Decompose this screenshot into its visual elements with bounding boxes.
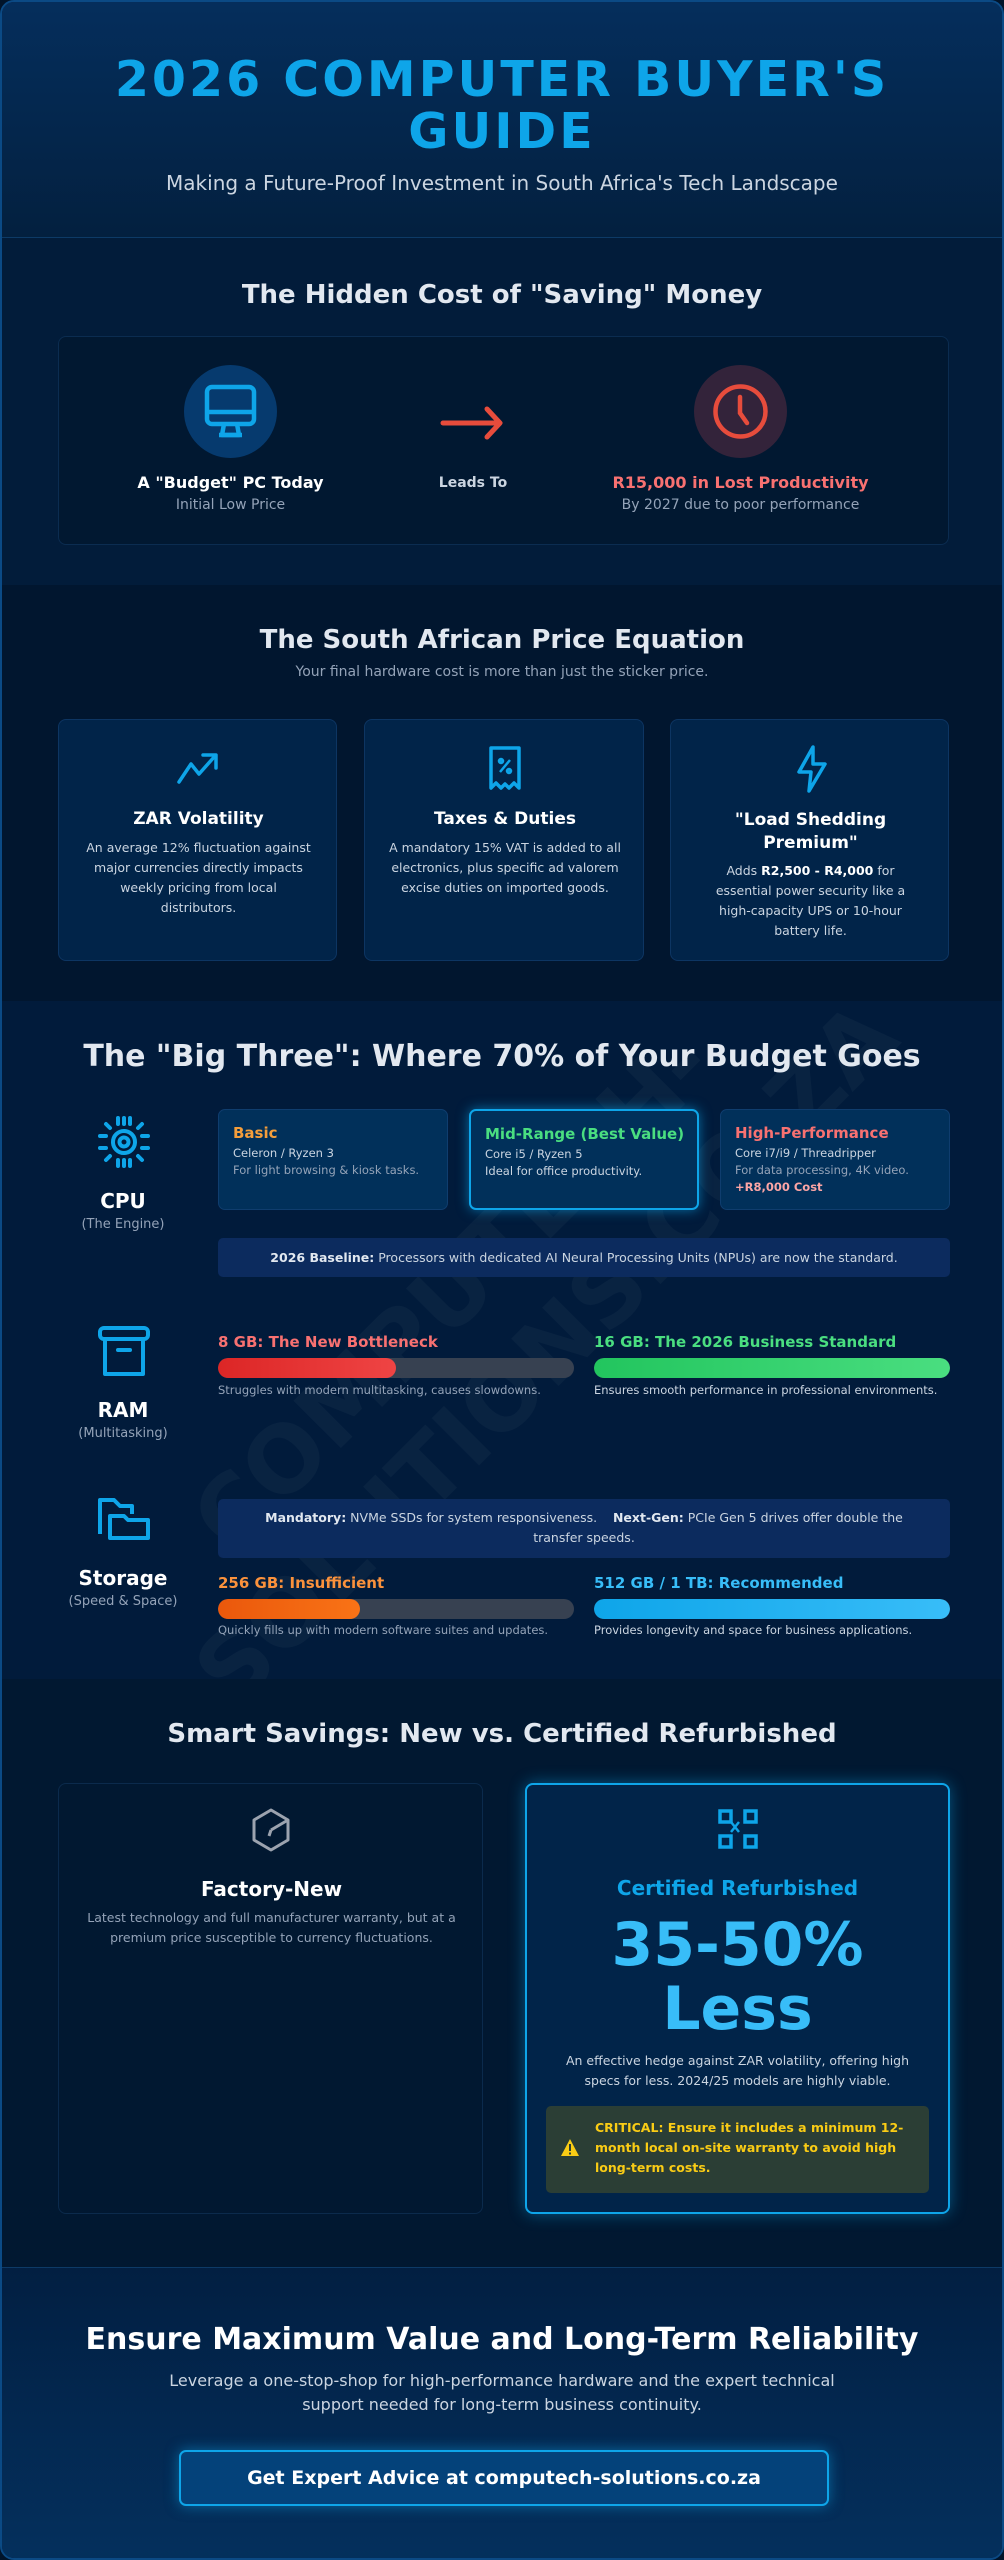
text: Ensures smooth performance in professional environments. [594, 1383, 937, 1397]
card: ZAR volatility: An average 12% fluctuation against major currencies directly impacts weekly pricing from local distributors. [86, 840, 311, 915]
card: certified refurbished: 35-50% [611, 1910, 864, 1980]
label: lost productivity: By 2027 due to poor performance [622, 497, 859, 513]
card: certified refurbished: An effective hedge against ZAR volatility, offering high specs for less. 2024/25 models are highly viable. [566, 2053, 909, 2088]
card: taxes [364, 719, 644, 961]
subtitle: Making a Future-Proof Investment in South Africa's Tech Landscape [166, 171, 838, 195]
tier: high-performance: High-Performance [735, 1124, 889, 1142]
card: factory new: Factory-New [201, 1877, 342, 1901]
icon: refurbish [718, 1809, 758, 1849]
label: leads to: Leads To [439, 475, 507, 491]
callout: critical warning: CRITICAL: Ensure it includes a minimum 12-month local on-site warranty to avoid high long-term costs. [595, 2120, 903, 2175]
section: big three [2, 1001, 1002, 1679]
section: smart savings [2, 1679, 1002, 2268]
text: Quickly fills up with modern software suites and updates. [218, 1623, 548, 1637]
text: Struggles with modern multitasking, causes slowdowns. [218, 1383, 541, 1397]
ram 16gb: 16 GB: The 2026 Business Standard [594, 1333, 896, 1351]
footer [2, 2268, 1002, 2560]
label: budget pc: A "Budget" PC Today [137, 473, 324, 492]
heading: The "Big Three": Where 70% of Your Budget Goes [83, 1039, 921, 1074]
arrow [440, 406, 503, 440]
label: storage [69, 1566, 177, 1609]
icon: monitor [184, 365, 277, 458]
icon: ram [98, 1326, 150, 1376]
label: lost productivity: R15,000 in Lost Productivity [612, 473, 869, 492]
label: storage: (Speed & Space) [69, 1594, 177, 1609]
tier: mid-range: Ideal for office productivity. [485, 1164, 642, 1178]
icon: trend up [177, 753, 218, 784]
comparison panel [58, 336, 949, 545]
card: factory new: Latest technology and full manufacturer warranty, but at a premium price susceptible to currency fluctuations. [87, 1910, 456, 1945]
baseline note [218, 1238, 950, 1277]
card: ZAR volatility: ZAR Volatility [133, 809, 264, 829]
tier: basic: For light browsing & kiosk tasks. [233, 1163, 419, 1177]
heading: Smart Savings: New vs. Certified Refurbished [167, 1719, 837, 1749]
tier: basic [218, 1109, 448, 1210]
tier: mid-range: Mid-Range (Best Value) [485, 1125, 684, 1143]
label: cpu: (The Engine) [81, 1217, 164, 1232]
icon: cpu [98, 1116, 150, 1168]
tier: high-performance [720, 1109, 950, 1210]
call to action button: Get Expert Advice at computech-solutions.co.za [247, 2467, 761, 2489]
card: ZAR volatility [58, 719, 337, 961]
ram 8gb: 8 GB: The New Bottleneck [218, 1333, 438, 1351]
heading: The Hidden Cost of "Saving" Money [242, 280, 762, 310]
tier: basic: Basic [233, 1124, 278, 1142]
tier: mid-range: Core i5 / Ryzen 5 [485, 1147, 583, 1161]
storage 256: 256 GB: Insufficient [218, 1574, 384, 1592]
label: ram [78, 1398, 168, 1441]
card: load shedding [670, 719, 949, 961]
header [2, 2, 1002, 238]
label: budget pc [137, 473, 324, 513]
tier: high-performance: +R8,000 Cost [735, 1180, 823, 1194]
tier: high-performance: Core i7/i9 / Threadripper [735, 1146, 876, 1160]
icon: clock [694, 365, 787, 458]
title: 2026 COMPUTER BUYER'S [115, 51, 889, 108]
section: price equation [2, 585, 1002, 1001]
call to action button [179, 2450, 829, 2506]
label: budget pc: Initial Low Price [176, 497, 285, 513]
label: ram: RAM [98, 1398, 148, 1422]
label: ram: (Multitasking) [78, 1426, 168, 1441]
icon: box [252, 1808, 290, 1852]
title [115, 51, 889, 160]
card: taxes: Taxes & Duties [434, 809, 576, 829]
card: certified refurbished [525, 1783, 950, 2214]
subheading: Your final hardware cost is more than just the sticker price. [296, 664, 708, 680]
icon: lightning [797, 745, 827, 793]
tier: mid-range [469, 1109, 699, 1210]
title: GUIDE [408, 103, 596, 160]
card: certified refurbished: Certified Refurbished [617, 1876, 858, 1900]
storage note [218, 1499, 950, 1558]
card: load shedding: "Load Shedding [735, 810, 886, 830]
footer text: Leverage a one-stop-shop for high-performance hardware and the expert technical support needed for long-term business continuity. [169, 2371, 835, 2414]
label: lost productivity [612, 473, 869, 513]
label: cpu: CPU [100, 1189, 146, 1213]
card: load shedding: Premium" [763, 833, 858, 853]
card: certified refurbished: Less [662, 1974, 813, 2044]
card: load shedding: Adds R2,500 - R4,000 for essential power security like a high-capacity UPS or 10-hour battery life. [716, 863, 905, 938]
baseline note: 2026 Baseline: Processors with dedicated AI Neural Processing Units (NPUs) are now the standard. [270, 1250, 898, 1265]
heading: The South African Price Equation [260, 625, 744, 655]
storage note: Mandatory: NVMe SSDs for system responsiveness. Next-Gen: PCIe Gen 5 drives offer double the transfer speeds. [265, 1510, 903, 1545]
storage 512: 512 GB / 1 TB: Recommended [594, 1574, 843, 1592]
label: cpu [81, 1189, 164, 1232]
watermark: COMPUTECH- [172, 1011, 734, 1573]
callout: critical warning [546, 2106, 929, 2193]
label: storage: Storage [79, 1566, 167, 1590]
footer heading: Ensure Maximum Value and Long-Term Reliability [86, 2322, 918, 2357]
section: hidden cost [2, 238, 1002, 585]
tier: high-performance: For data processing, 4K video. [735, 1163, 909, 1177]
card: factory new [58, 1783, 483, 2214]
icon: receipt [489, 746, 521, 790]
text: Provides longevity and space for business applications. [594, 1623, 912, 1637]
tier: basic: Celeron / Ryzen 3 [233, 1146, 334, 1160]
icon: storage folder [98, 1498, 150, 1540]
card: taxes: A mandatory 15% VAT is added to all electronics, plus specific ad valorem excise duties on imported goods. [389, 840, 621, 895]
